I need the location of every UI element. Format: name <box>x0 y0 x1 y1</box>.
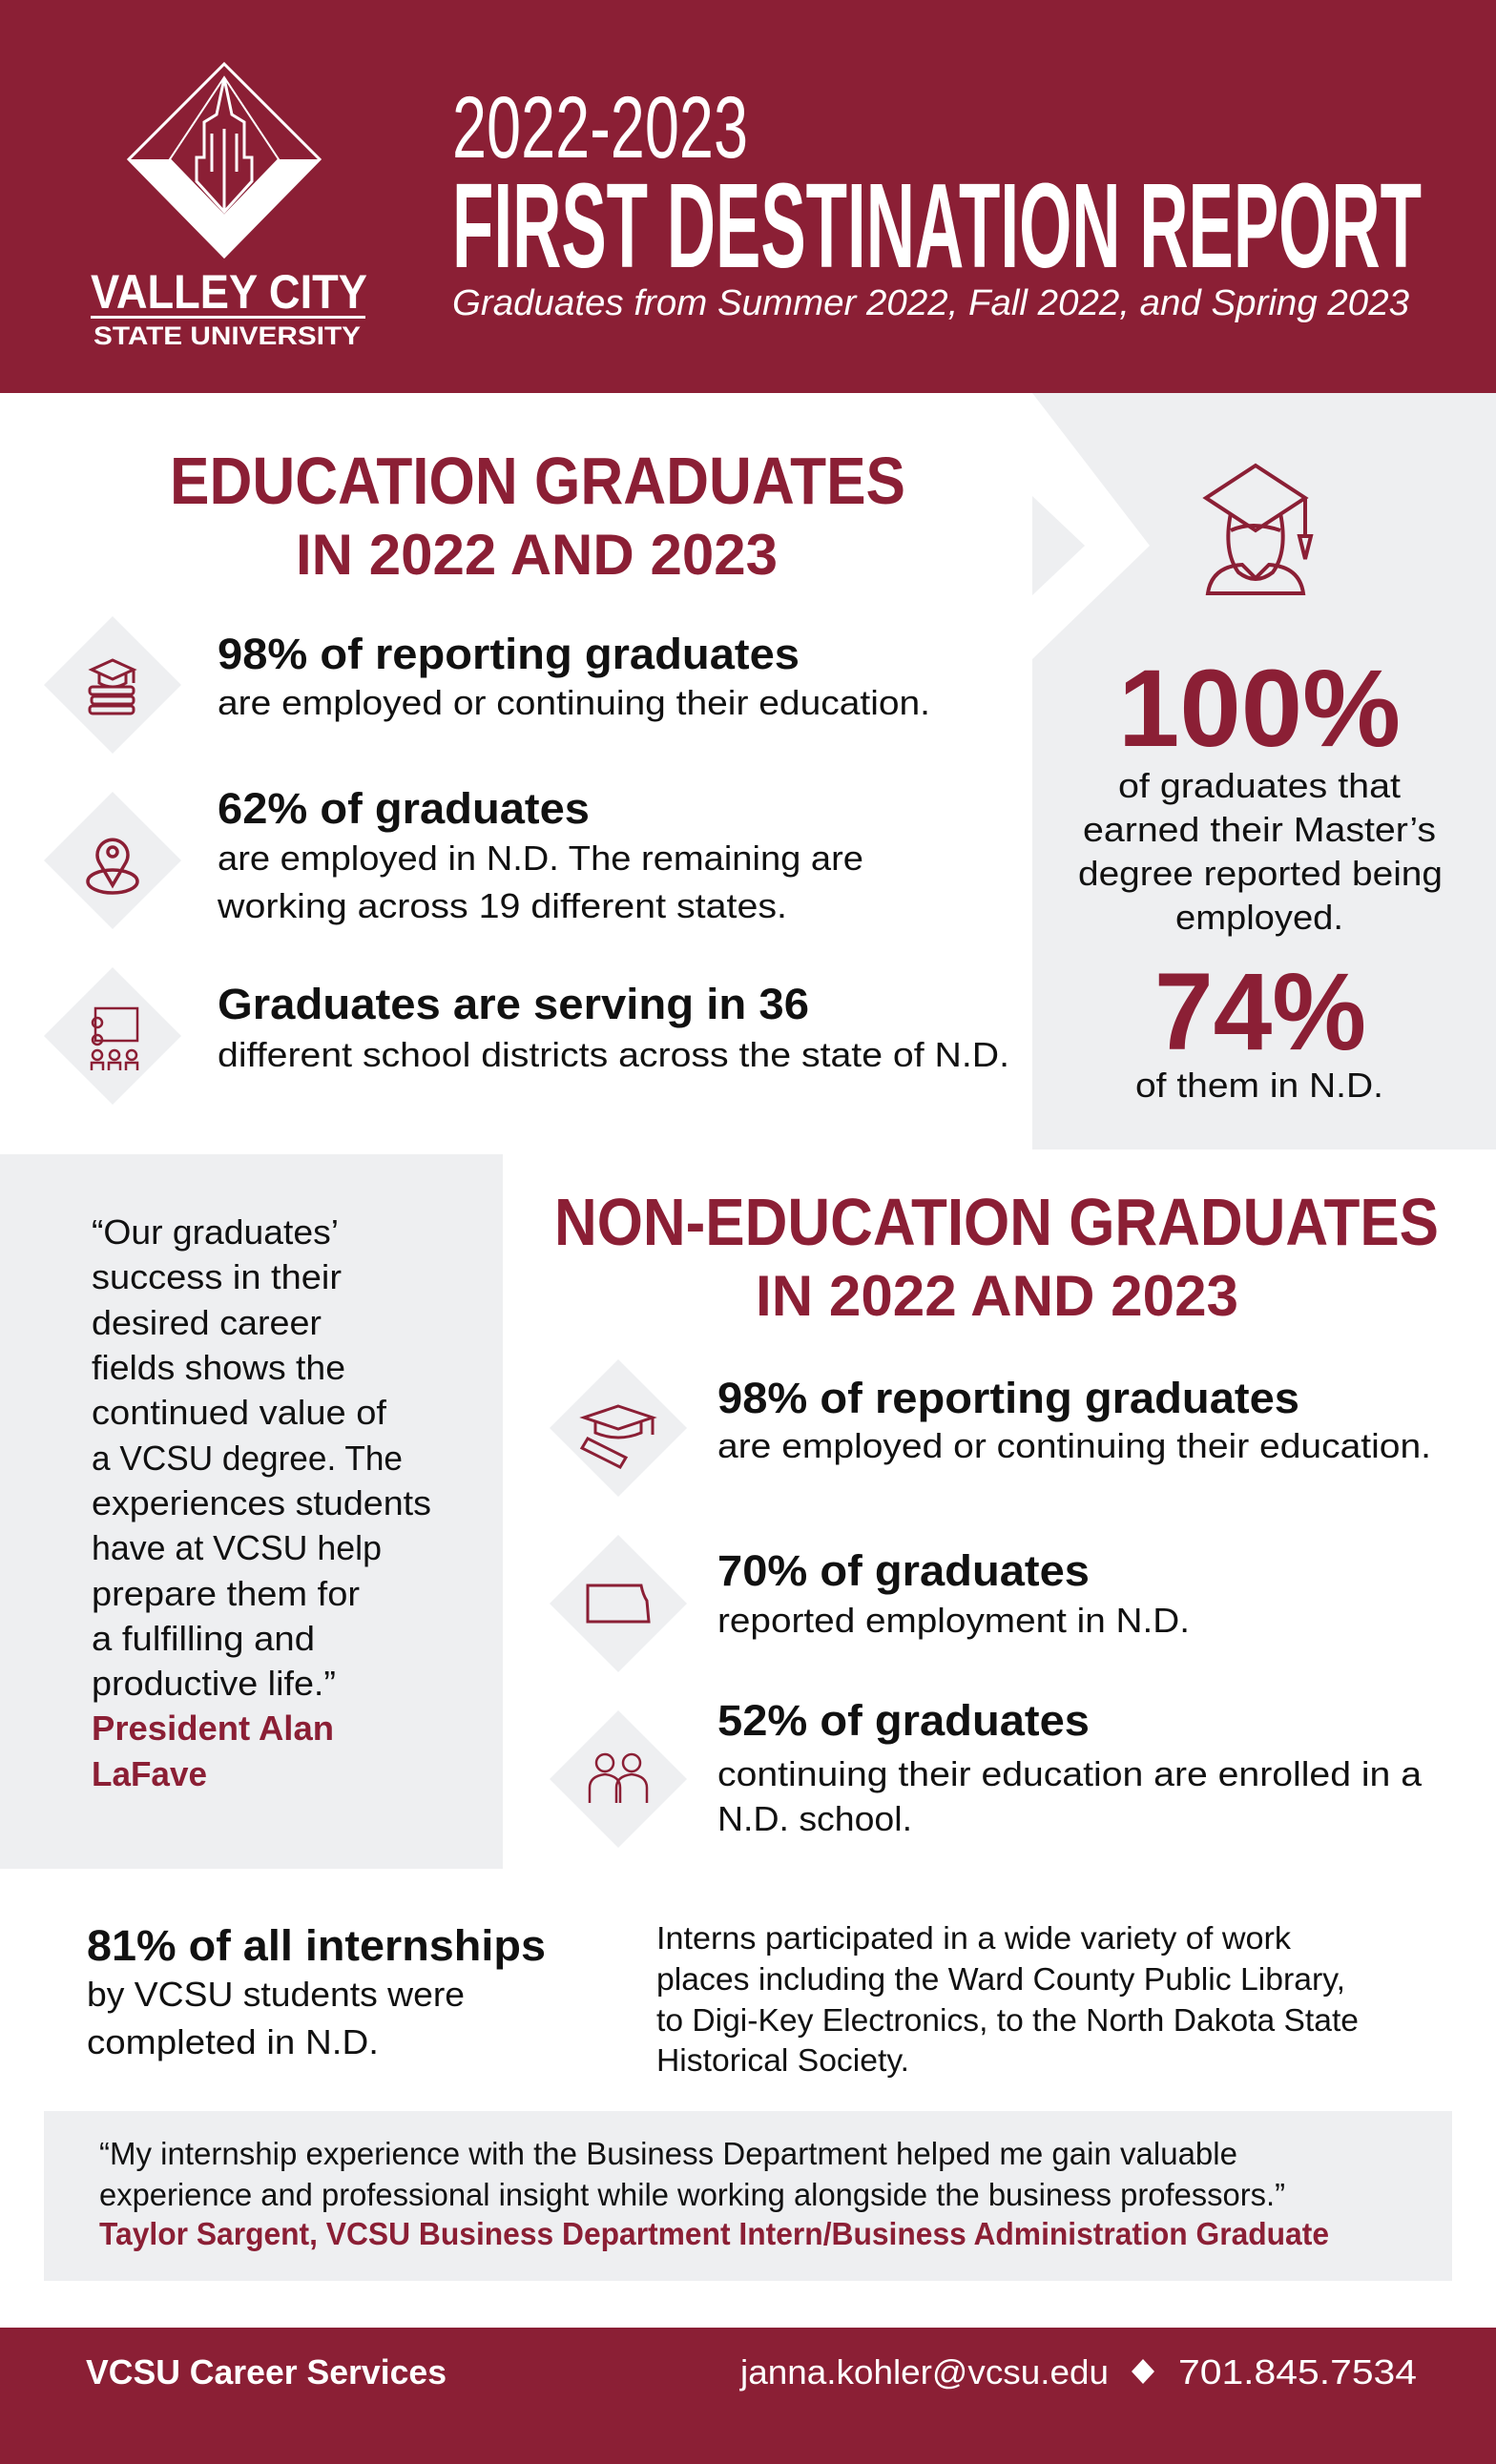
stat: non-education 70%: reported employment in N.D. <box>717 1601 1190 1640</box>
stat: internships: 81% of all internships <box>87 1921 546 1970</box>
header band <box>0 0 1496 393</box>
panel: master's graduates: of graduates that <box>1118 766 1401 805</box>
stat: non-education 70%: 70% of graduates <box>717 1546 1090 1595</box>
panel: president quote: desired career <box>92 1303 322 1342</box>
panel: master's graduates <box>1032 393 1496 1149</box>
stat: non-education 98%: 98% of reporting graduates <box>717 1374 1299 1422</box>
text block: internship places: places including the Ward County Public Library, <box>656 1961 1345 1997</box>
stat: education 36 districts: Graduates are serving in 36 <box>218 980 809 1028</box>
stat: internships: completed in N.D. <box>87 2022 379 2061</box>
stat: internships <box>87 1921 546 2061</box>
stat: non-education 52% <box>550 1696 1423 1848</box>
text block: internship places <box>656 1920 1359 2078</box>
stat: internships: by VCSU students were <box>87 1975 465 2014</box>
panel: president quote: experiences students <box>92 1483 431 1522</box>
heading: education graduates <box>170 444 905 587</box>
panel: master's graduates: of them in N.D. <box>1135 1066 1383 1105</box>
title year: 2022-2023 <box>452 79 748 176</box>
icon: graduate <box>1206 466 1311 593</box>
callout: intern quote <box>44 2111 1452 2281</box>
footer <box>0 2328 1496 2464</box>
panel: president quote: “Our graduates’ <box>92 1212 339 1252</box>
stat: education 98% <box>44 616 930 754</box>
text block: internship places: Historical Society. <box>656 2042 909 2078</box>
stat: education 98%: are employed or continuing their education. <box>218 683 930 722</box>
panel: president quote: prepare them for <box>92 1574 360 1613</box>
stat: non-education 52%: 52% of graduates <box>717 1696 1090 1745</box>
logo: VALLEY CITY <box>91 265 367 319</box>
stat: education 62%: 62% of graduates <box>218 784 590 833</box>
stat: non-education 98%: are employed or continuing their education. <box>717 1426 1431 1465</box>
panel: president quote: LaFave <box>92 1754 207 1793</box>
text block: internship places: to Digi-Key Electronics, to the North Dakota State <box>656 2002 1359 2038</box>
stat: education 98%: 98% of reporting graduates <box>218 630 800 678</box>
heading: education graduates: EDUCATION GRADUATES <box>170 444 905 518</box>
panel: master's graduates: earned their Master’s <box>1083 810 1436 849</box>
panel: master's graduates: 74% <box>1154 951 1366 1073</box>
heading: non-education graduates: IN 2022 AND 2023 <box>756 1264 1238 1328</box>
stat: non-education 52%: continuing their education are enrolled in a <box>717 1754 1423 1793</box>
panel: president quote: have at VCSU help <box>92 1528 382 1567</box>
footer: janna.kohler@vcsu.edu <box>739 2352 1109 2392</box>
panel: master's graduates: degree reported being <box>1078 854 1443 893</box>
callout: intern quote: “My internship experience with the Business Department helped me gain valuable <box>99 2136 1237 2171</box>
panel: president quote: President Alan <box>92 1708 334 1748</box>
stat: education 62%: working across 19 different states. <box>217 886 787 925</box>
callout: intern quote: Taylor Sargent, VCSU Business Department Intern/Business Administration Graduate <box>99 2216 1329 2251</box>
callout: intern quote: experience and professional insight while working alongside the business professors.” <box>99 2177 1285 2212</box>
logo <box>91 64 367 350</box>
heading: non-education graduates <box>554 1185 1439 1328</box>
panel: president quote <box>0 1154 503 1869</box>
footer: VCSU Career Services <box>86 2352 447 2392</box>
panel: president quote: productive life.” <box>92 1664 336 1703</box>
stat: non-education 98% <box>550 1359 1431 1497</box>
panel: president quote: a fulfilling and <box>92 1619 315 1658</box>
panel: president quote: a VCSU degree. The <box>92 1439 403 1478</box>
panel: president quote: fields shows the <box>92 1348 345 1387</box>
logo: STATE UNIVERSITY <box>94 321 361 350</box>
stat: education 36 districts <box>44 967 1009 1105</box>
heading: education graduates: IN 2022 AND 2023 <box>296 523 778 587</box>
stat: education 62% <box>44 784 863 929</box>
panel: master's graduates: employed. <box>1175 898 1343 937</box>
panel: master's graduates: 100% <box>1118 648 1401 770</box>
text block: internship places: Interns participated in a wide variety of work <box>656 1920 1292 1956</box>
panel: president quote: continued value of <box>92 1393 387 1432</box>
footer: 701.845.7534 <box>1178 2352 1417 2392</box>
stat: non-education 52%: N.D. school. <box>717 1799 912 1838</box>
panel: president quote: success in their <box>92 1257 342 1296</box>
subtitle: Graduates from Summer 2022, Fall 2022, and Spring 2023 <box>452 283 1409 323</box>
stat: education 36 districts: different school districts across the state of N.D. <box>218 1035 1009 1074</box>
stat: non-education 70% <box>550 1535 1190 1672</box>
stat: education 62%: are employed in N.D. The remaining are <box>218 839 863 878</box>
